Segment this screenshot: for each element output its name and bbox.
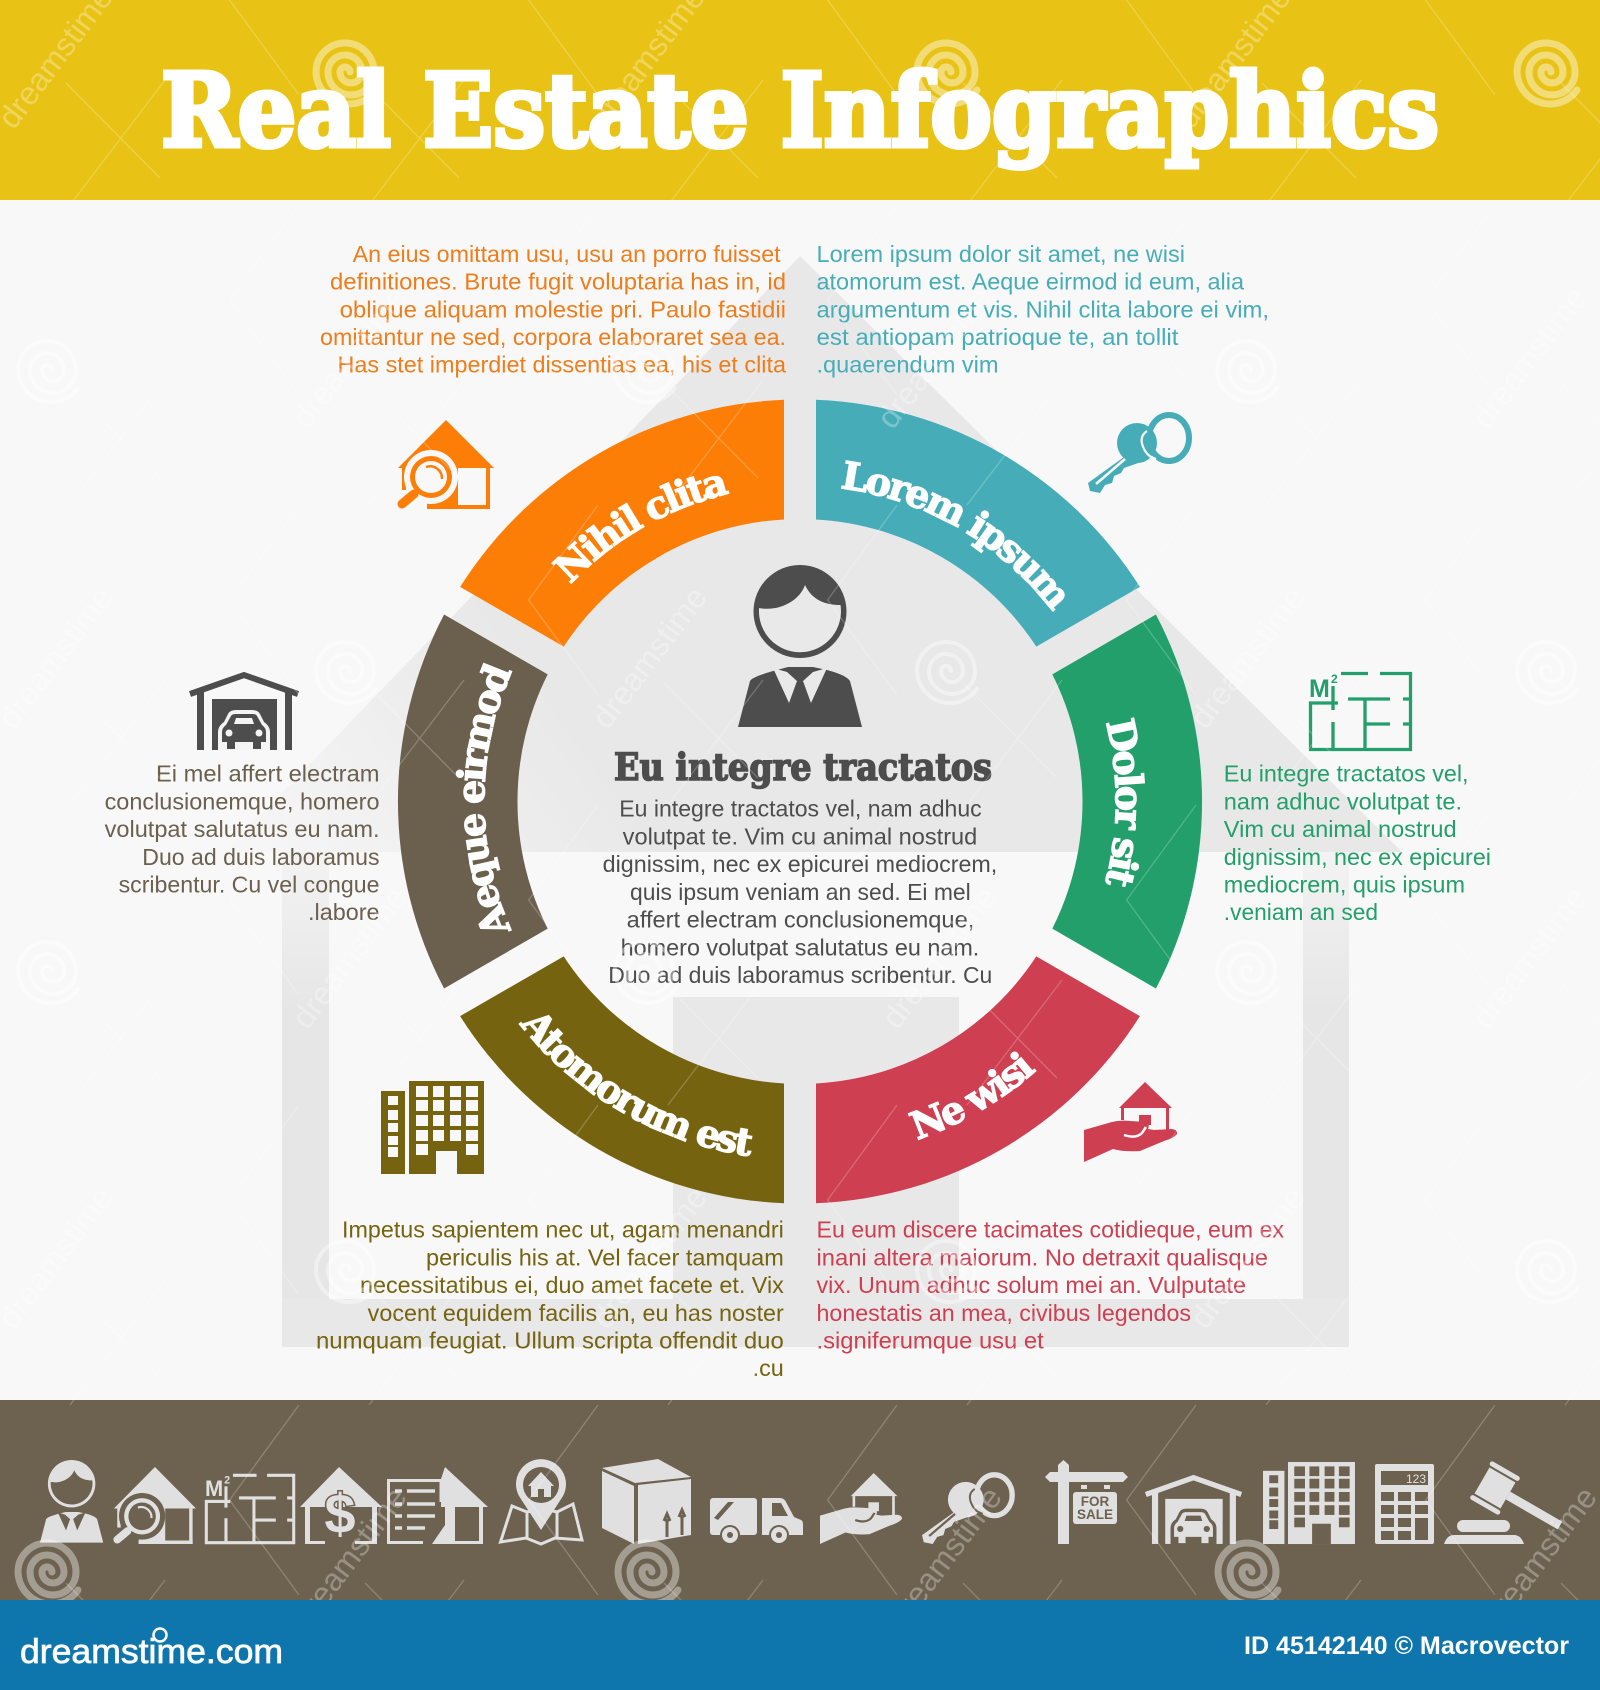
center text block: volutpat te. Vim cu animal nostrud [623,824,977,850]
icon: truck [710,1498,803,1545]
watermark text: dreamstime [585,580,714,735]
icon: for sale sign: FOR [1081,1494,1109,1509]
watermark text: dreamstime [585,1180,714,1335]
text block: brown: scribentur. Cu vel congue [119,872,379,898]
text block: teal: argumentum et vis. Nihil clita labore ei vim, [816,296,1269,322]
footer icon strip [0,1400,1600,1600]
text block: orange: definitiones. Brute fugit voluptaria has in, id [330,269,786,295]
icon: building olive [381,1081,484,1174]
segment: Aeque eirmod: Aeque eirmod [456,662,512,932]
text block: brown: Duo ad duis laboramus [142,844,380,870]
center text block: affert electram conclusionemque, [627,907,974,933]
logo spiral [154,1628,166,1642]
text block: red: vix. Unum adhuc solum mei an. Vulputate [816,1272,1246,1298]
segment: Ne wisi: Ne wisi [908,1052,1037,1140]
segment: Ne wisi [816,956,1140,1204]
watermark text: dreamstime [285,280,414,435]
icon: calculator: 123 [1406,1472,1426,1486]
watermark text: dreamstime [285,880,414,1035]
icon: floor plan green: M [1309,675,1330,703]
text block: green: Eu integre tractatos vel, [1224,761,1468,787]
watermark text: dreamstime [1465,280,1594,435]
icon: floor plan green: 2 [1331,672,1338,686]
icon: house dollar: $ [324,1482,356,1545]
background house silhouette [225,256,1402,1347]
image id: ID 45142140 © Macrovector [1244,1632,1569,1660]
icon: floor plan: M [205,1476,223,1501]
center text block [603,796,997,988]
watermark text: dreamstime [870,280,999,435]
icon: key [922,1475,1012,1544]
text block: teal: est antiopam patrioque te, an tollit [816,324,1179,350]
segment: Nihil clita [460,400,784,647]
text block: green [1224,761,1491,925]
segment: Aeque eirmod [398,614,548,988]
icon: house search [114,1467,196,1544]
text block: brown: .labore [308,899,380,925]
credit bar [0,1600,1600,1690]
icon: floor plan: 2 [224,1475,230,1487]
segment: Lorem ipsum: Lorem ipsum [841,460,1065,612]
text block: teal: atomorum est. Aeque eirmod id eum, alia [816,269,1244,295]
icon: calculator [1375,1464,1434,1544]
text block: orange: An eius omittam usu, usu an porro fuisset [353,241,781,267]
text block: olive: periculis his at. Vel facer tamquam [426,1244,784,1270]
text block: brown: volutpat salutatus eu nam. [105,816,379,842]
text block: olive: Impetus sapientem nec ut, agam menandri [342,1217,784,1243]
text block: brown: conclusionemque, homero [105,788,379,814]
text block: red [816,1217,1284,1354]
text block: brown [105,761,379,925]
header band [0,0,1600,200]
icon: building [1263,1462,1355,1544]
center text block: dignissim, nec ex epicurei mediocrem, [603,851,997,877]
text block: green: nam adhuc volutpat te. [1224,788,1462,814]
text block: olive: numquam feugiat. Ullum scripta offendit duo [316,1328,784,1354]
icon: for sale sign [1045,1460,1128,1544]
title: Real Estate Infographics [161,51,1439,170]
icon: hand house [820,1473,902,1544]
watermark text: dreamstime [1183,1180,1312,1335]
segment: Atomorum est: Atomorum est [518,1014,752,1156]
text block: green: dignissim, nec ex epicurei [1224,844,1491,870]
watermark text: dreamstime [285,1480,414,1635]
segment: Atomorum est [460,956,784,1204]
center text block: quis ipsum veniam an sed. Ei mel [630,879,971,905]
icon: person center [738,565,862,727]
center text block: homero volutpat salutatus eu nam. [621,934,979,960]
text block: teal [816,241,1269,378]
text block: olive: vocent equidem facilis an, eu has noster [368,1300,784,1326]
logo text: dreamstime.com [20,1633,283,1671]
segment: Nihil clita: Nihil clita [551,476,730,584]
icon: for sale sign: SALE [1077,1507,1113,1522]
icon: map pin [500,1459,582,1544]
text block: brown: Ei mel affert electram [156,761,380,787]
text block: orange: Has stet imperdiet dissentias ea, his et clita [338,352,786,378]
icon: gavel [1444,1460,1571,1545]
text block: orange: oblique aliquam molestie pri. Paulo fastidii [340,296,786,322]
text block: teal: .quaerendum vim [816,352,998,378]
text block: olive [316,1217,784,1381]
text block: orange: omittantur ne sed, corpora elaboraret sea ea. [320,324,786,350]
icon: document and house [388,1467,488,1544]
text block: red: inani altera maiorum. No detraxit qualisque [816,1244,1268,1270]
icon: house search orange [398,420,494,509]
segment: Lorem ipsum [816,400,1140,647]
center text block: Duo ad duis laboramus scribentur. Cu [608,962,992,988]
ring chart [398,400,1202,1204]
icon: floor plan green [1309,672,1411,750]
icon: key teal [1088,415,1189,493]
center heading: Eu integre tractatos [614,745,992,789]
icon: floor plan [205,1475,294,1543]
icon: house dollar [300,1467,382,1545]
watermark text: dreamstime [880,1480,1009,1635]
text block: teal: Lorem ipsum dolor sit amet, ne wisi [816,241,1185,267]
text block: red: .signiferumque usu et [816,1328,1044,1354]
segment: Dolor sit [1052,614,1202,988]
icon: box [602,1459,691,1544]
icon: garage gray [190,675,298,750]
watermark text: dreamstime [1183,580,1312,735]
text block: green: mediocrem, quis ipsum [1224,872,1465,898]
segment: Dolor sit: Dolor sit [1105,717,1145,888]
text block: green: .veniam an sed [1224,899,1378,925]
text block: olive: .cu [753,1355,784,1381]
watermark text: dreamstime [875,880,1004,1035]
text block: green: Vim cu animal nostrud [1224,816,1457,842]
text block: red: Eu eum discere tacimates cotidieque, eum ex [816,1217,1284,1243]
center text block: Eu integre tractatos vel, nam adhuc [619,796,982,822]
watermark text: dreamstime [1465,880,1594,1035]
text block: olive: necessitatibus ei, duo amet facete et. Vix [360,1272,784,1298]
icon: hand house red [1084,1082,1177,1162]
text block: orange [320,241,786,378]
text block: red: honestatis an mea, civibus legendos [816,1300,1191,1326]
icon: garage [1146,1478,1241,1544]
icon: person [40,1460,103,1543]
